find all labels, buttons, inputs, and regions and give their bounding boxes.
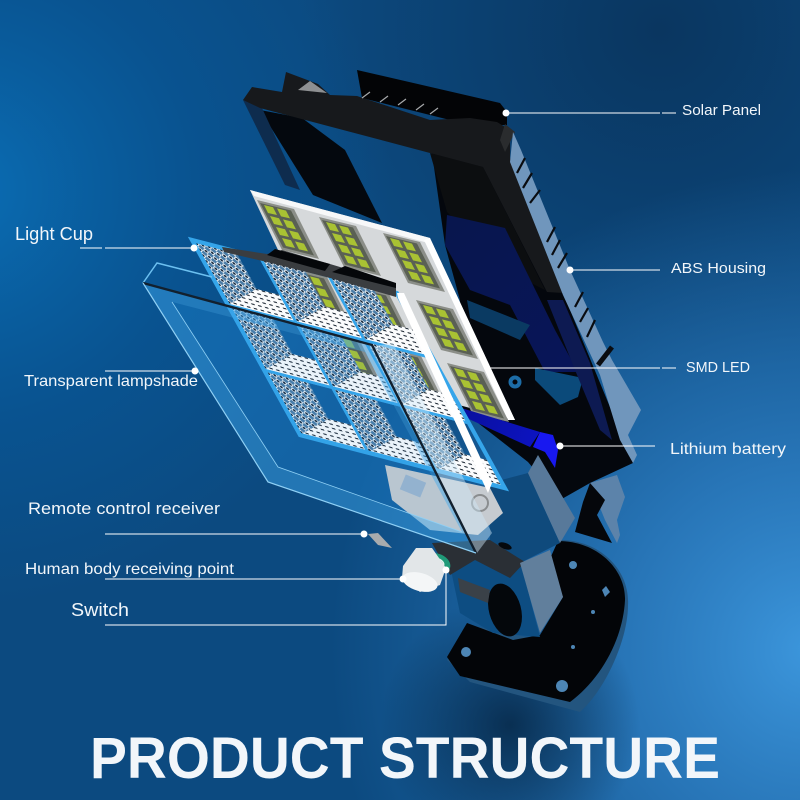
transparent lampshade bbox=[143, 263, 492, 553]
left inner black grid bbox=[260, 110, 382, 223]
lampshade back tint bbox=[172, 302, 462, 532]
label: Human body receiving point bbox=[25, 561, 406, 582]
label: Light Cup: Light Cup bbox=[15, 224, 93, 244]
label: SMD LED: SMD LED bbox=[686, 359, 750, 376]
LED board bbox=[250, 190, 515, 422]
lampshade side band bbox=[370, 343, 492, 553]
mounting bracket bbox=[432, 455, 628, 712]
light cup reflector grid bbox=[192, 240, 505, 493]
SMD LED modules bbox=[257, 200, 509, 422]
label: ABS Housing bbox=[566, 260, 766, 277]
label: Lithium battery bbox=[556, 441, 786, 458]
label: Solar Panel bbox=[502, 102, 761, 119]
lampshade top edge bbox=[143, 263, 212, 283]
human body sensor and switch bbox=[400, 548, 454, 595]
title: PRODUCT STRUCTURE bbox=[90, 726, 720, 791]
lower rear housing interior bbox=[430, 153, 633, 500]
label: Switch: Switch bbox=[71, 600, 129, 620]
mount arm bbox=[432, 540, 563, 640]
housing side wall with vents bbox=[510, 132, 641, 463]
lampshade dark edge bbox=[143, 283, 476, 553]
lithium battery bbox=[458, 407, 558, 468]
mount neck bbox=[490, 455, 575, 563]
rear zigzag edge bbox=[575, 475, 625, 543]
label: Lithium battery: Lithium battery bbox=[670, 441, 786, 458]
housing frame bbox=[243, 72, 563, 293]
remote control receiver bbox=[368, 533, 392, 548]
cup dark top strips bbox=[222, 247, 396, 297]
rear control plate bbox=[385, 465, 503, 535]
frame clips bbox=[298, 81, 515, 152]
label: Transparent lampshade: Transparent lampshade bbox=[24, 373, 198, 390]
label: Remote control receiver bbox=[28, 499, 368, 538]
label: ABS Housing: ABS Housing bbox=[671, 260, 766, 277]
cup cells bbox=[192, 240, 505, 488]
ABS housing and solar panel assembly bbox=[243, 70, 641, 543]
label: SMD LED bbox=[484, 359, 750, 376]
label: Remote control receiver: Remote control receiver bbox=[28, 499, 220, 518]
bracket rim bbox=[447, 540, 628, 712]
cup white side edge bbox=[397, 293, 492, 493]
label: Switch bbox=[71, 566, 450, 625]
bracket black plate bbox=[447, 541, 625, 702]
label: Solar Panel: Solar Panel bbox=[682, 102, 761, 119]
housing left strip bbox=[243, 100, 300, 190]
board plate bbox=[250, 190, 515, 420]
lampshade rim bbox=[143, 283, 476, 553]
label: Light Cup bbox=[15, 224, 198, 252]
bracket holes bbox=[461, 561, 610, 692]
label: Human body receiving point: Human body receiving point bbox=[25, 561, 235, 578]
solar panel plate bbox=[357, 70, 507, 125]
